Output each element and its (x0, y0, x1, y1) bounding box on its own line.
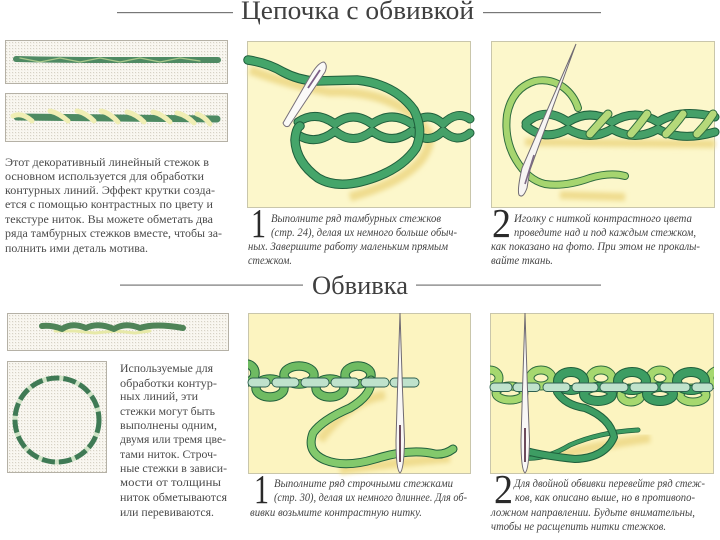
swatch: whipped running stitch circle (8, 362, 106, 472)
text block: stitch description: ряда тамбурных стежков вместе, чтобы за- (5, 228, 222, 240)
dark loops (558, 372, 705, 401)
text block: running stitch description: или перевиваются. (120, 507, 214, 519)
step 1 caption: вивки возьмите контрастную нитку. (250, 507, 422, 519)
panel: step 2 whipping with light thread (492, 42, 715, 208)
running stitches (490, 383, 713, 392)
text block: running stitch description: Используемые для (120, 363, 214, 375)
step 2 caption: 2 (492, 200, 511, 246)
step 1 caption: стежком. (248, 255, 292, 267)
running stitches (248, 378, 419, 387)
step 2 caption (491, 200, 700, 267)
icon: needle (396, 313, 404, 473)
step 1 caption: Выполните ряд тамбурных стежков (271, 213, 441, 225)
text block: running stitch description: выполнены одним, (120, 420, 217, 432)
text block: stitch description: полнить ими деталь мотива. (5, 243, 148, 255)
icon: needle (521, 313, 530, 473)
step 2 caption: как показано на фото. При этом не прокалы- (491, 241, 700, 253)
text block: running stitch description: двумя или тремя цве- (120, 434, 226, 446)
text block: running stitch description: тами ниток. Строч- (120, 449, 217, 461)
panel: step 1 chain with needle (248, 42, 470, 208)
text block: stitch description: Этот декоративный линейный стежок в (5, 157, 210, 169)
tail threads (525, 392, 638, 459)
step 2 caption (490, 466, 705, 533)
panel: step 2 double whipping (481, 313, 720, 474)
text block: running stitch description: мости от толщины (120, 477, 221, 489)
loose thread (506, 80, 625, 185)
text block: stitch description: ется с помощью контрастных по цвету и (5, 199, 213, 211)
text block: stitch description (5, 157, 222, 255)
step 2 caption: ложном направлении. Будьте внимательны, (490, 507, 695, 519)
text block: running stitch description: обработки контур- (120, 378, 217, 390)
text block: running stitch description: стежки могут быть (120, 406, 215, 418)
icon: needle (518, 44, 576, 196)
whipping loops (237, 364, 453, 464)
step 2 caption: ков, как описано выше, но в противопо- (515, 492, 695, 504)
step 1 caption: ных. Завершите работу маленьким прямым (248, 241, 449, 253)
swatch: green chain stitch on fabric (6, 40, 228, 84)
text block: running stitch description: ных линий, эти (120, 391, 198, 403)
step 2 caption: Для двойной обвивки перевейте ряд стеж- (513, 477, 705, 490)
step 1 caption: (стр. 30), делая их немного длиннее. Для об- (274, 492, 467, 504)
chain (526, 113, 715, 136)
text block: running stitch description: ниток обметываются (120, 492, 228, 504)
title: Обвивка: Обвивка (312, 271, 408, 300)
light thread twists (590, 114, 713, 134)
step 2 caption: чтобы не расщепить нитки стежков. (491, 521, 666, 533)
swatch: chain stitch whipped with cream thread (6, 94, 228, 142)
icon: needle (283, 62, 326, 127)
text block: stitch description: контурных линий. Эффект крутки созда- (5, 185, 215, 197)
text block: running stitch description (120, 363, 228, 519)
text block: running stitch description: ные стежки в зависи- (120, 463, 227, 475)
chain (298, 115, 470, 140)
light loops (481, 370, 720, 402)
text block: stitch description: текстуре ниток. Вы можете обметать два (5, 214, 213, 226)
panel: step 1 running stitch with thread (237, 313, 470, 474)
step 1 caption (250, 466, 467, 519)
text block: stitch description: основном используется для обработки (5, 171, 204, 183)
step 2 caption: 2 (494, 466, 513, 512)
step 2 caption: вайте ткань. (491, 254, 553, 267)
step 1 caption: Выполните ряд строчными стежками (274, 478, 453, 490)
step 2 caption: Иголку с ниткой контрастного цвета (513, 212, 692, 225)
loose thread (248, 60, 420, 184)
step 1 caption (248, 200, 457, 267)
step 2 caption: проведите над и под каждым стежком, (514, 227, 696, 239)
step 1 caption: 1 (254, 466, 269, 512)
step 1 caption: 1 (251, 200, 266, 246)
step 1 caption: (стр. 24), делая их немного больше обыч- (271, 227, 457, 239)
swatch: whipped running stitch (8, 314, 228, 350)
